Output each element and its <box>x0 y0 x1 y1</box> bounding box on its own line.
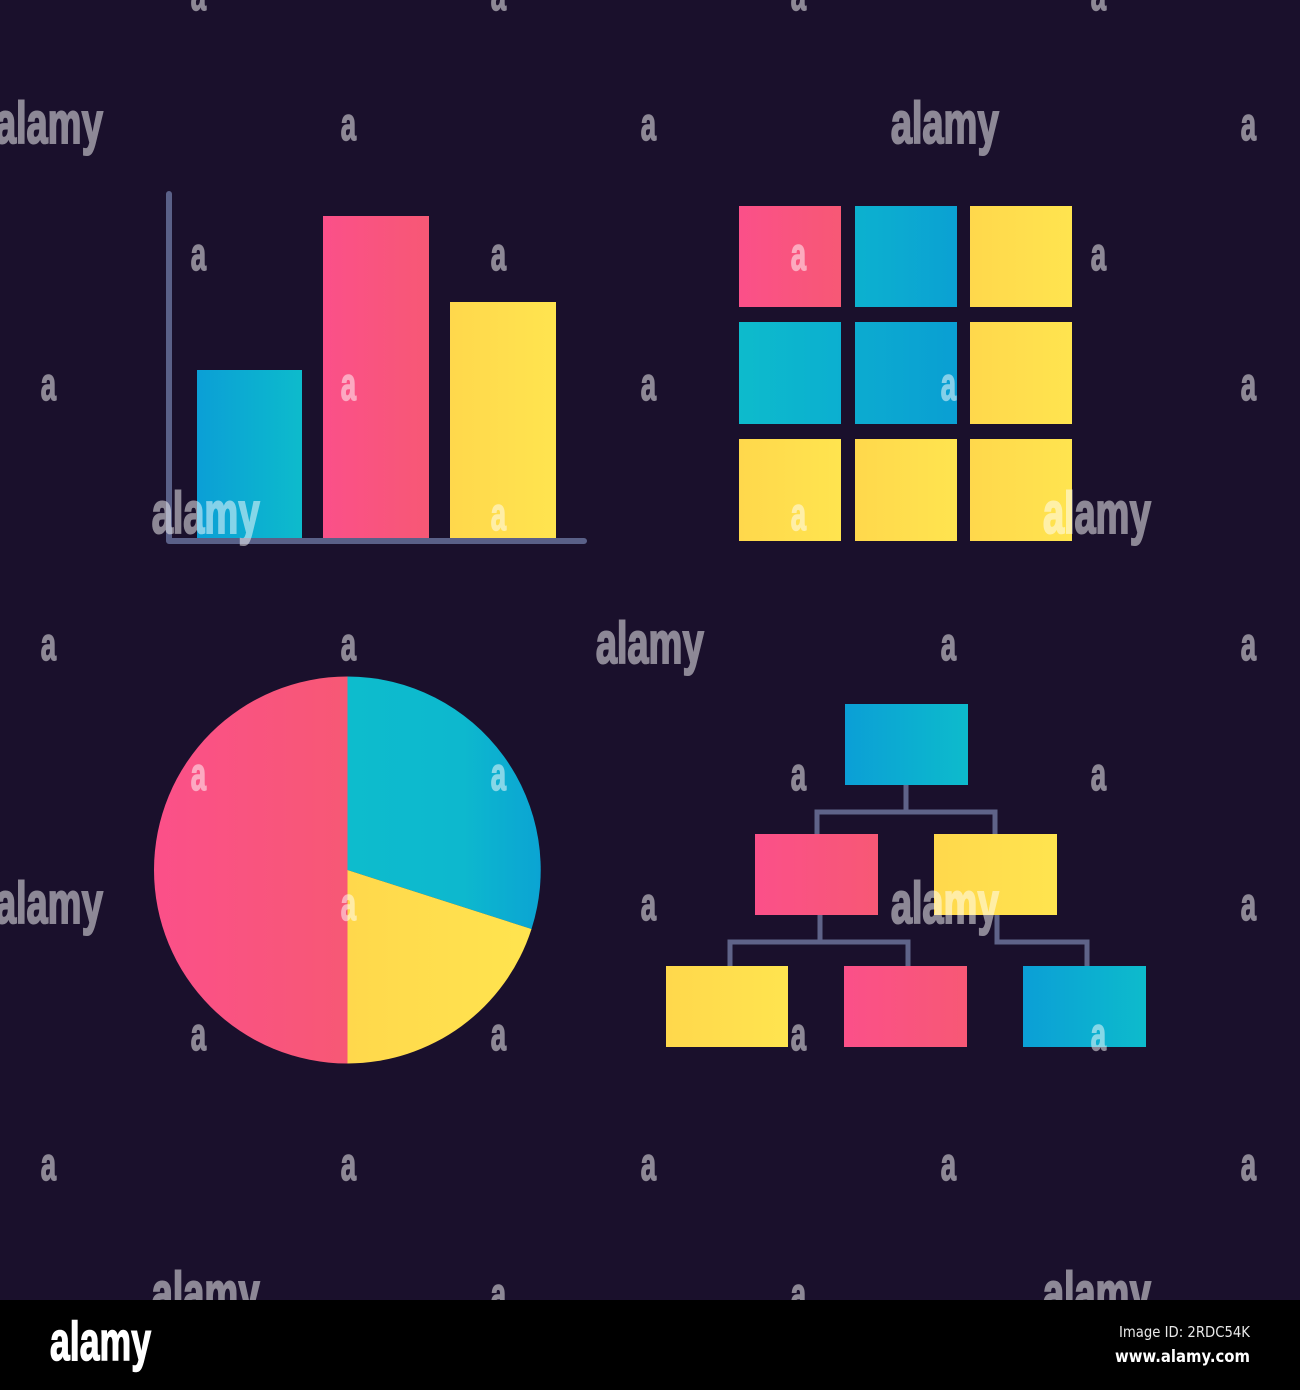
watermark letters: aaa <box>341 100 1257 151</box>
pink half slice <box>154 676 348 1064</box>
watermark letters: aaaa <box>191 230 1107 281</box>
row 3 tiles <box>739 439 1072 541</box>
image id: Image ID: 2RDC54K <box>1119 1323 1251 1341</box>
yellow bar <box>450 302 556 538</box>
row 2 tiles <box>739 322 1072 424</box>
bottom centre node <box>844 966 967 1047</box>
watermark words: alamy <box>891 872 999 936</box>
watermark words: alamy <box>1043 1262 1151 1326</box>
pie chart <box>154 676 541 1064</box>
watermark letters: aaaa <box>191 750 1107 801</box>
website: www.alamy.com <box>1115 1347 1250 1367</box>
watermark letters: aaaaa <box>41 360 1257 411</box>
middle left node <box>755 834 878 915</box>
watermark letters: aa <box>491 1270 807 1321</box>
bottom left node <box>666 966 788 1047</box>
top node <box>845 704 968 785</box>
watermark words: alamy <box>152 482 260 546</box>
footer bar <box>0 1300 1300 1390</box>
middle right node <box>934 834 1057 915</box>
watermark letters: aaaa <box>191 1010 1107 1061</box>
row 1 tiles <box>739 206 1072 307</box>
footer logo: alamy <box>50 1310 151 1372</box>
watermark words: alamy <box>891 92 999 156</box>
tile grid <box>739 206 1072 541</box>
watermark letters: aaaa <box>41 620 1257 671</box>
watermark words: alamy <box>596 612 704 676</box>
connectors <box>730 785 1087 966</box>
blue bar <box>197 370 302 538</box>
organisation chart <box>666 704 1146 1047</box>
bottom right node <box>1023 966 1146 1047</box>
watermark letters: aaa <box>341 880 1257 931</box>
watermark letters: aa <box>491 490 807 541</box>
yellow slice <box>348 870 532 1064</box>
watermark words <box>0 92 1151 1326</box>
chart axes <box>169 194 584 541</box>
watermark words: alamy <box>1043 482 1151 546</box>
teal slice <box>348 676 541 929</box>
watermark words: alamy <box>152 1262 260 1326</box>
bar chart <box>169 194 584 541</box>
pink bar <box>323 216 429 538</box>
watermark letters: aaaaa <box>41 1140 1257 1191</box>
